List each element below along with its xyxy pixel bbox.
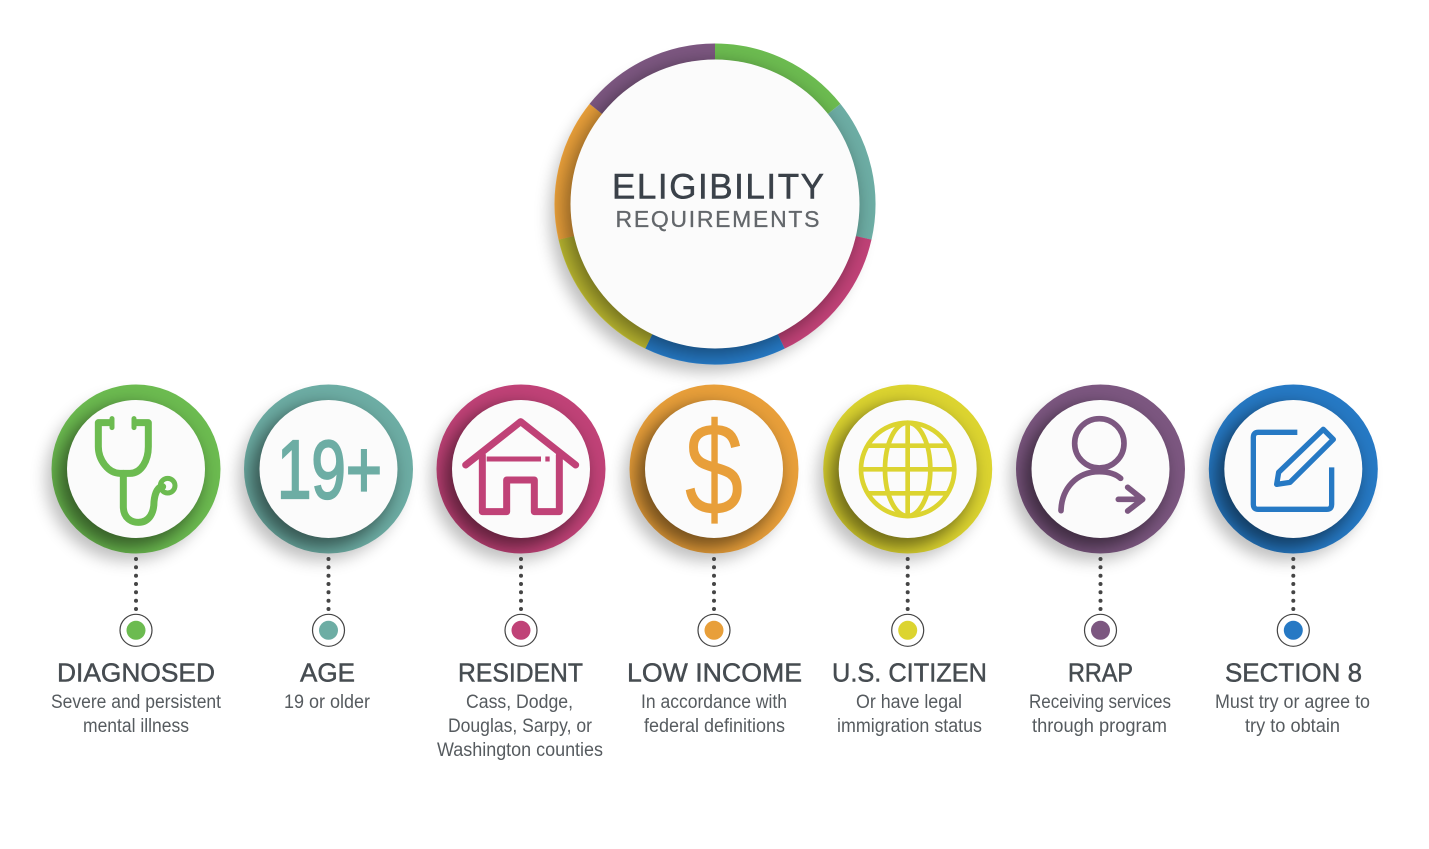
label (1029, 658, 1171, 737)
connector dots (519, 557, 523, 611)
marker (698, 614, 730, 646)
label: Or have legal (856, 692, 962, 713)
label: Receiving services (1029, 692, 1171, 713)
title: eligibility: ELIGIBILITY (612, 168, 824, 206)
marker (312, 614, 344, 646)
icon circle: dollar (624, 384, 798, 561)
icon circle: dollar: $ (685, 396, 743, 543)
icon circle: 19+: 19+ (277, 423, 382, 516)
connector dots (326, 557, 330, 611)
label: federal definitions (644, 716, 785, 737)
label: AGE (300, 658, 355, 688)
label: SECTION 8 (1225, 658, 1362, 688)
marker (892, 614, 924, 646)
connector dots (1098, 557, 1102, 611)
icon circle: edit pencil (1203, 384, 1378, 561)
column: age (238, 384, 413, 713)
marker (505, 614, 537, 646)
column: diagnosed (46, 384, 222, 737)
label: RESIDENT (458, 658, 583, 688)
label: Severe and persistent (51, 692, 222, 713)
connector dots (134, 557, 138, 611)
label (51, 658, 222, 737)
label: immigration status (837, 716, 982, 737)
connector dots (712, 557, 716, 611)
label (284, 658, 371, 713)
label: 19 or older (284, 692, 371, 713)
label: try to obtain (1245, 716, 1340, 737)
label (627, 658, 802, 737)
label: In accordance with (641, 692, 787, 713)
centre disc (570, 60, 860, 348)
label: LOW INCOME (627, 658, 802, 688)
column: resident (431, 384, 606, 761)
column: u.s. citizen (818, 384, 992, 737)
label: Washington counties (437, 740, 603, 761)
icon circle: house (431, 384, 606, 561)
label: RRAP (1068, 658, 1133, 688)
label: U.S. CITIZEN (832, 658, 987, 688)
icon circle: globe (818, 384, 992, 561)
connector dots (906, 557, 910, 611)
connector dots (1291, 557, 1295, 611)
label: through program (1032, 716, 1167, 737)
icon circle: stethoscope (46, 384, 220, 561)
label (1215, 658, 1370, 737)
segmented ring (563, 52, 867, 356)
column: rrap (1010, 384, 1185, 737)
marker (1084, 614, 1116, 646)
icon circle: 19+ (238, 384, 413, 561)
subtitle: requirements: REQUIREMENTS (616, 206, 820, 232)
infographic: eligibility requirements (38, 44, 1378, 760)
central badge (550, 52, 867, 372)
label: Douglas, Sarpy, or (448, 716, 593, 737)
column: section 8 (1203, 384, 1378, 737)
label: mental illness (83, 716, 189, 737)
marker (1277, 614, 1309, 646)
label (832, 658, 987, 737)
label (437, 658, 603, 761)
icon circle: person with arrow (1010, 384, 1185, 561)
marker (120, 614, 152, 646)
label: Must try or agree to (1215, 692, 1370, 713)
label: Cass, Dodge, (466, 692, 573, 713)
column: low income (624, 384, 802, 737)
label: DIAGNOSED (57, 658, 215, 688)
